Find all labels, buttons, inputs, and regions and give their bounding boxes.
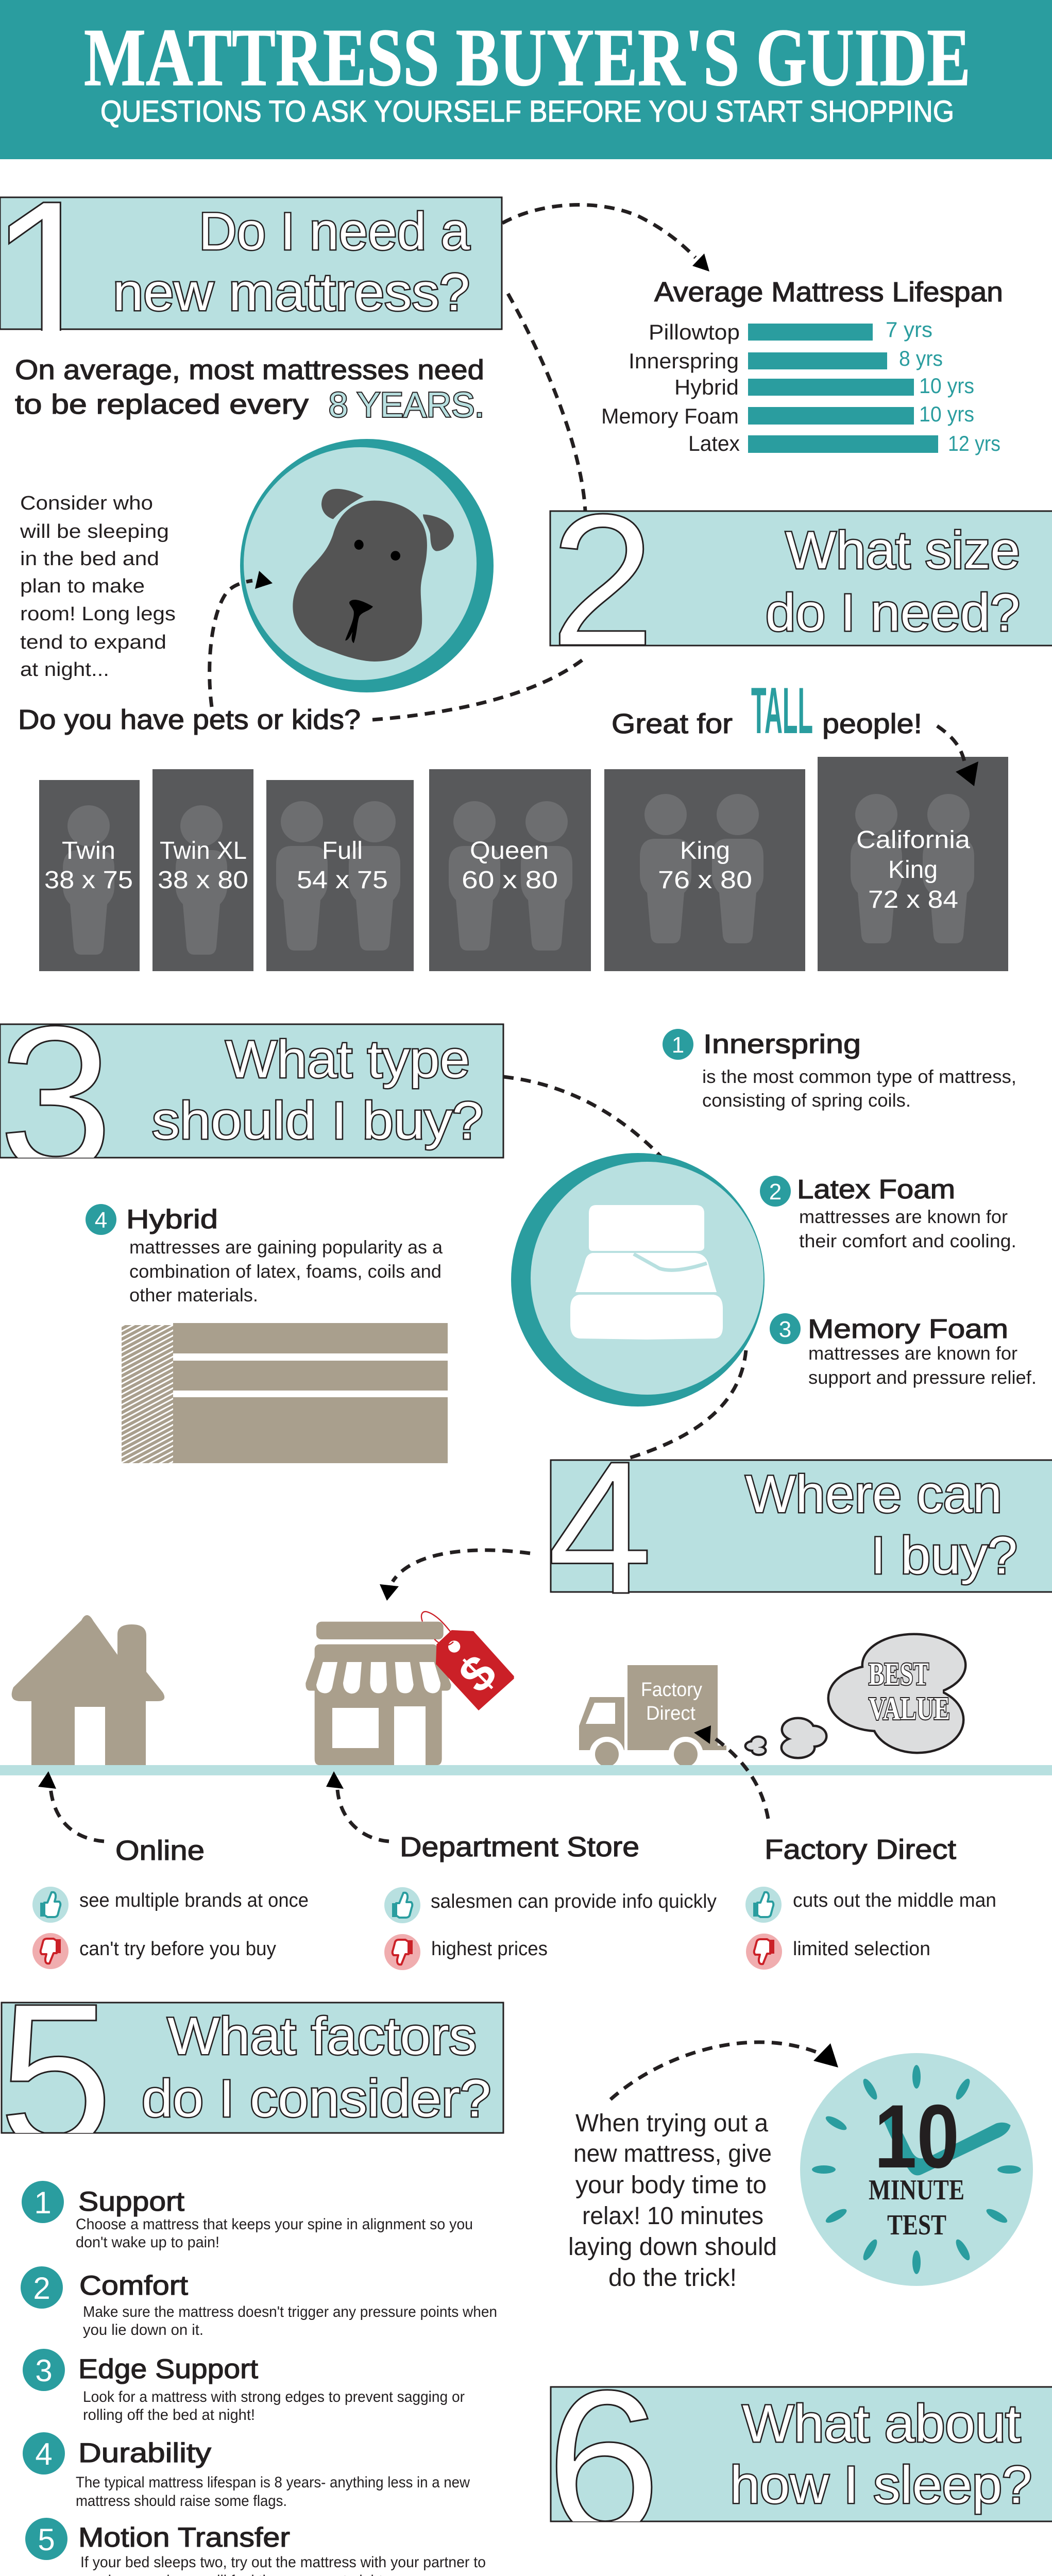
arrow: test text to clock [610,2042,838,2099]
text: who sleeps in the bed [20,493,176,681]
size: twin xl: Twin XL [160,837,247,865]
factor: durability: 4 [35,2437,53,2471]
text: who sleeps in the bed: in the bed and [20,548,159,570]
text: ten minute test advice: your body time to [575,2172,767,2199]
factor: edge support: 3 [35,2353,53,2388]
text: great for tall people: Great for [612,708,733,739]
type: latex foam: mattresses are known for [799,1206,1008,1227]
size: twin: Twin [62,837,115,865]
bar chart: average mattress lifespan: Average Mattress Lifespan [654,277,1003,308]
icon: house [12,1615,164,1765]
text: ten minute test advice: do the trick! [608,2264,737,2292]
replacement statement: On average, most mattresses need [15,354,484,385]
option: factory direct: limited selection [793,1938,930,1960]
heading panel: question 2: 2 [550,476,655,685]
text: great for tall people: people! [822,708,922,739]
text: ten minute test advice: relax! 10 minutes [582,2202,763,2230]
bar chart: average mattress lifespan: Innerspring [629,349,739,373]
icon: ten minute clock: MINUTE [869,2174,964,2206]
heading panel: question 1 [0,197,503,331]
heading panel: question 6: how I sleep? [730,2455,1032,2514]
type: latex foam: Latex Foam [797,1175,955,1205]
arrow: department store label to store [326,1771,389,1841]
heading panel: question 3 [0,1023,504,1158]
size: full [266,780,414,971]
heading panel: question 5: What factors [167,2007,477,2065]
callout: best value cloud: VALUE [869,1691,950,1726]
text: ten minute test advice: new mattress, give [573,2140,772,2167]
heading panel: question 6: What about [742,2394,1021,2453]
heading panel: question 2: do I need? [766,583,1020,642]
type: memory foam: Memory Foam [808,1314,1008,1344]
text: great for tall people: TALL [751,674,813,747]
size: queen: 60 x 80 [462,867,558,894]
icon: price tag: $ [448,1644,507,1703]
size: full: Full [322,837,363,865]
arrow: question 1 to question 2 [508,294,585,511]
heading panel: question 3: should I buy? [152,1091,483,1150]
text: ten minute test advice: When trying out a [575,2110,768,2137]
size: king [604,769,805,971]
text: ten minute test advice [568,2110,777,2292]
replacement statement: 8 YEARS. [329,385,484,425]
text: ten minute test advice: laying down should [568,2233,777,2261]
size: california king: 72 x 84 [868,886,958,913]
icon: ten minute clock [800,2053,1033,2286]
factor: motion transfer: Motion Transfer [78,2522,290,2553]
type: memory foam: support and pressure relief. [808,1367,1037,1388]
size: queen [429,769,591,971]
factor: comfort: Make sure the mattress doesn't trigger any pressure points when [83,2303,497,2320]
arrow: pets question to dog [210,571,273,707]
heading panel: question 3: 3 [0,983,113,1213]
text: who sleeps in the bed: at night... [20,659,109,681]
type: innerspring: 1 [672,1032,684,1058]
type: innerspring: Innerspring [703,1029,861,1059]
text: great for tall people [612,674,922,747]
type: hybrid: 4 [95,1208,107,1233]
bar chart: average mattress lifespan: Memory Foam [601,404,739,428]
heading panel: question 5: 5 [0,1960,113,2191]
option: online: Online [115,1835,205,1866]
type: hybrid: Hybrid [126,1205,218,1234]
factor: support [22,2181,473,2251]
size: california king [818,757,1008,971]
text: who sleeps in the bed: room! Long legs [20,603,176,625]
factor: durability: The typical mattress lifespan is 8 years- anything less in a new [76,2474,470,2491]
type: memory foam [770,1313,1037,1388]
arrow: pets question to question 2 [372,659,584,720]
callout: best value cloud: BEST [869,1657,929,1692]
image: hybrid mattress layers [122,1323,448,1463]
option: department store: Department Store [400,1832,639,1862]
arrow: factory direct label to truck [694,1725,768,1819]
bar chart: average mattress lifespan: Pillowtop [649,320,740,344]
type: hybrid [86,1204,443,1306]
icon: delivery truck: Factory [641,1679,702,1701]
type: latex foam: their comfort and cooling. [799,1230,1016,1251]
type: hybrid: other materials. [129,1284,258,1306]
mattress sizes [39,757,1008,971]
text: who sleeps in the bed: will be sleeping [20,521,169,543]
arrow: online label to house [38,1771,104,1841]
bar chart: average mattress lifespan: 8 yrs [899,346,943,370]
option: online: see multiple brands at once [79,1890,309,1911]
header banner [0,0,1052,159]
replacement statement: to be replaced every [15,389,309,420]
heading panel: question 1: Do I need a [199,202,470,261]
heading panel: question 5 [1,2002,504,2134]
icon: ten minute clock: TEST [887,2209,946,2241]
factor: edge support: Look for a mattress with strong edges to prevent sagging or [83,2388,465,2405]
option: online [32,1835,309,1969]
type: latex foam [760,1175,1016,1251]
arrow: tall people to california king [937,726,978,786]
size: queen: Queen [470,837,549,865]
factor: comfort: Comfort [79,2270,188,2301]
option: factory direct [745,1834,996,1970]
option: online: can't try before you buy [79,1938,276,1960]
type: hybrid: mattresses are gaining popularity as a [129,1236,443,1258]
heading panel: question 6: 6 [546,2347,660,2576]
factor: comfort [21,2266,497,2338]
heading panel: question 5: do I consider? [142,2069,491,2128]
size: king: 76 x 80 [658,867,752,894]
type: memory foam: mattresses are known for [808,1343,1017,1364]
size: twin xl: 38 x 80 [158,867,248,894]
bar chart: average mattress lifespan: 7 yrs [886,317,932,342]
factor: edge support: rolling off the bed at night! [83,2406,255,2424]
option: factory direct: Factory Direct [765,1834,956,1865]
size: california king: California [856,826,970,854]
icon: delivery truck [579,1665,726,1772]
heading panel: question 6 [550,2386,1052,2522]
option: department store: salesmen can provide info quickly [431,1891,717,1912]
icon: price tag [421,1612,514,1710]
size: california king: King [888,856,938,884]
factor: durability: mattress should raise some flags. [76,2493,287,2510]
option: factory direct: cuts out the middle man [793,1890,996,1911]
icon: delivery truck: Direct [646,1703,695,1724]
heading panel: question 1: new mattress? [113,263,470,321]
arrow: memory foam to question 4 [624,1350,746,1460]
type: innerspring: consisting of spring coils. [702,1090,911,1111]
factor: durability [23,2432,470,2510]
bar chart: average mattress lifespan [601,277,1003,455]
factor: comfort: you lie down on it. [83,2321,203,2338]
factor: edge support [23,2349,465,2424]
size: twin xl [152,769,253,971]
bar chart: average mattress lifespan: Latex [688,431,740,455]
text: who sleeps in the bed: plan to make [20,575,145,597]
size: king: King [680,837,730,865]
factor: motion transfer [25,2518,486,2576]
factor: motion transfer: 5 [38,2522,55,2557]
factor: comfort: 2 [33,2271,50,2306]
bar chart: average mattress lifespan: 10 yrs [919,374,974,398]
size: full: 54 x 75 [297,867,388,894]
option: department store [384,1832,717,1970]
factor: durability: Durability [78,2438,212,2468]
icon: bed in circle [511,1153,765,1406]
arrow: question 4 to department store [380,1550,530,1601]
option: department store: highest prices [431,1938,548,1960]
type: memory foam: 3 [779,1317,791,1342]
heading panel: question 4 [547,1421,1052,1633]
size: twin: 38 x 75 [44,867,133,894]
bar chart: average mattress lifespan: Hybrid [674,375,739,399]
bar chart: average mattress lifespan: 12 yrs [948,431,1000,455]
heading panel: question 4: 4 [547,1421,653,1633]
icon: ten minute clock: 10 [874,2087,959,2187]
text: who sleeps in the bed: tend to expand [20,632,166,653]
factor: support: 1 [34,2185,52,2220]
factor: support: don't wake up to pain! [76,2234,219,2251]
type: innerspring [663,1029,1016,1111]
replacement statement [15,354,484,425]
arrow: question 3 to bed icon [503,1077,661,1157]
subtitle: QUESTIONS TO ASK YOURSELF BEFORE YOU START SHOPPING [100,95,954,128]
icon: dog in circle [240,439,494,692]
type: hybrid: combination of latex, foams, coils and [129,1261,442,1282]
factor: edge support: Edge Support [78,2354,258,2384]
text: who sleeps in the bed: Consider who [20,493,153,514]
heading panel: question 4: I buy? [871,1526,1017,1585]
size: twin [39,780,140,971]
factor: motion transfer: If your bed sleeps two, try out the mattress with your partner to [80,2554,486,2571]
text: pets or kids: Do you have pets or kids? [18,704,361,735]
bar chart: average mattress lifespan: 10 yrs [919,402,974,426]
factor: support: Choose a mattress that keeps your spine in alignment so you [76,2216,473,2233]
callout: best value cloud [745,1634,965,1758]
ground line [0,1765,1052,1775]
heading panel: question 2 [550,476,1052,685]
type: latex foam: 2 [769,1179,782,1205]
factor: support: Support [78,2187,184,2217]
heading panel: question 2: What size [786,521,1020,580]
heading panel: question 3: What type [226,1030,470,1089]
icon: department store [306,1612,514,1765]
heading panel: question 4: Where can [745,1465,1002,1523]
arrow: question 1 to lifespan chart [502,205,709,272]
type: innerspring: is the most common type of mattress, [702,1066,1016,1087]
